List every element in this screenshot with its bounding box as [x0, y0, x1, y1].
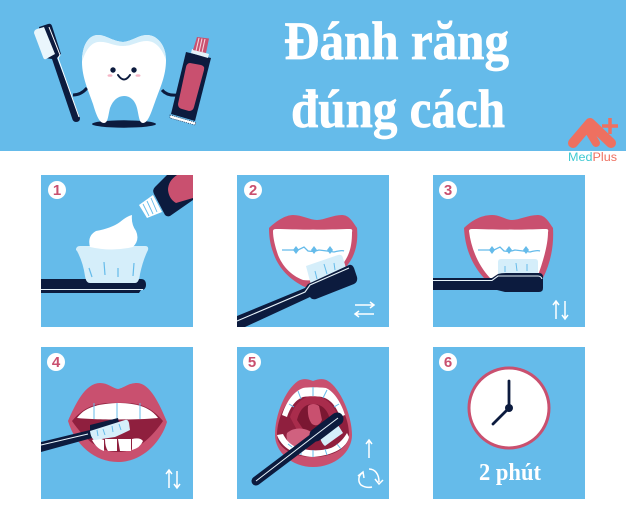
step badge 5: 5 — [248, 354, 256, 371]
title — [284, 11, 509, 139]
panel 4: brush inner teeth — [41, 347, 193, 499]
step badge 3: 3 — [444, 182, 452, 199]
icon: toothbrush — [34, 24, 80, 122]
step badge 6: 6 — [444, 354, 452, 371]
bristles — [90, 420, 130, 440]
panel 1: apply toothpaste — [41, 175, 193, 327]
step badge 2 — [244, 181, 262, 199]
arrows: side to side — [355, 302, 374, 317]
wide open mouth — [275, 379, 352, 467]
panel 6: two minutes — [433, 347, 585, 499]
step badge 4: 4 — [52, 354, 61, 371]
bristles — [76, 246, 148, 283]
step badge 5 — [243, 353, 261, 371]
toothbrush — [41, 279, 146, 293]
lower teeth — [92, 438, 143, 451]
header band — [0, 0, 626, 151]
toothbrush — [41, 418, 120, 452]
bristles — [320, 425, 343, 446]
icon: tooth mascot with brush and paste — [34, 24, 211, 128]
arrows: up and down — [553, 301, 568, 319]
icon: clock — [469, 368, 549, 448]
title: đúng cách — [291, 79, 505, 139]
panel 5: brush chewing surfaces — [237, 347, 389, 499]
title: Đánh răng — [284, 11, 509, 71]
toothbrush — [256, 418, 338, 481]
open lips — [68, 383, 167, 462]
tooth face — [108, 67, 140, 80]
mouth — [464, 215, 553, 278]
toothbrush — [237, 265, 357, 327]
panel 3: brush outer teeth up and down — [433, 175, 585, 327]
bristles — [306, 255, 346, 285]
bristles — [498, 259, 538, 275]
panel 2: brush outer teeth sideways — [237, 175, 389, 327]
arrows: up and down — [166, 470, 180, 488]
step badge 1: 1 — [53, 182, 61, 199]
toothbrush — [433, 273, 543, 292]
toothpaste tube — [139, 175, 193, 218]
mouth — [269, 215, 357, 287]
logo: MedPlus: MedPlus — [568, 152, 617, 164]
toothpaste dollop — [89, 215, 137, 250]
logo: MedPlus — [568, 118, 618, 164]
arrows: up and rotate — [358, 440, 383, 487]
step badge 1 — [48, 181, 66, 199]
icon: toothpaste tube — [170, 37, 211, 125]
label: 2 phút: 2 phút — [479, 460, 541, 486]
step badge 3 — [439, 181, 457, 199]
step badge 4 — [47, 353, 65, 371]
step badge 2: 2 — [249, 182, 257, 199]
step badge 6 — [439, 353, 457, 371]
